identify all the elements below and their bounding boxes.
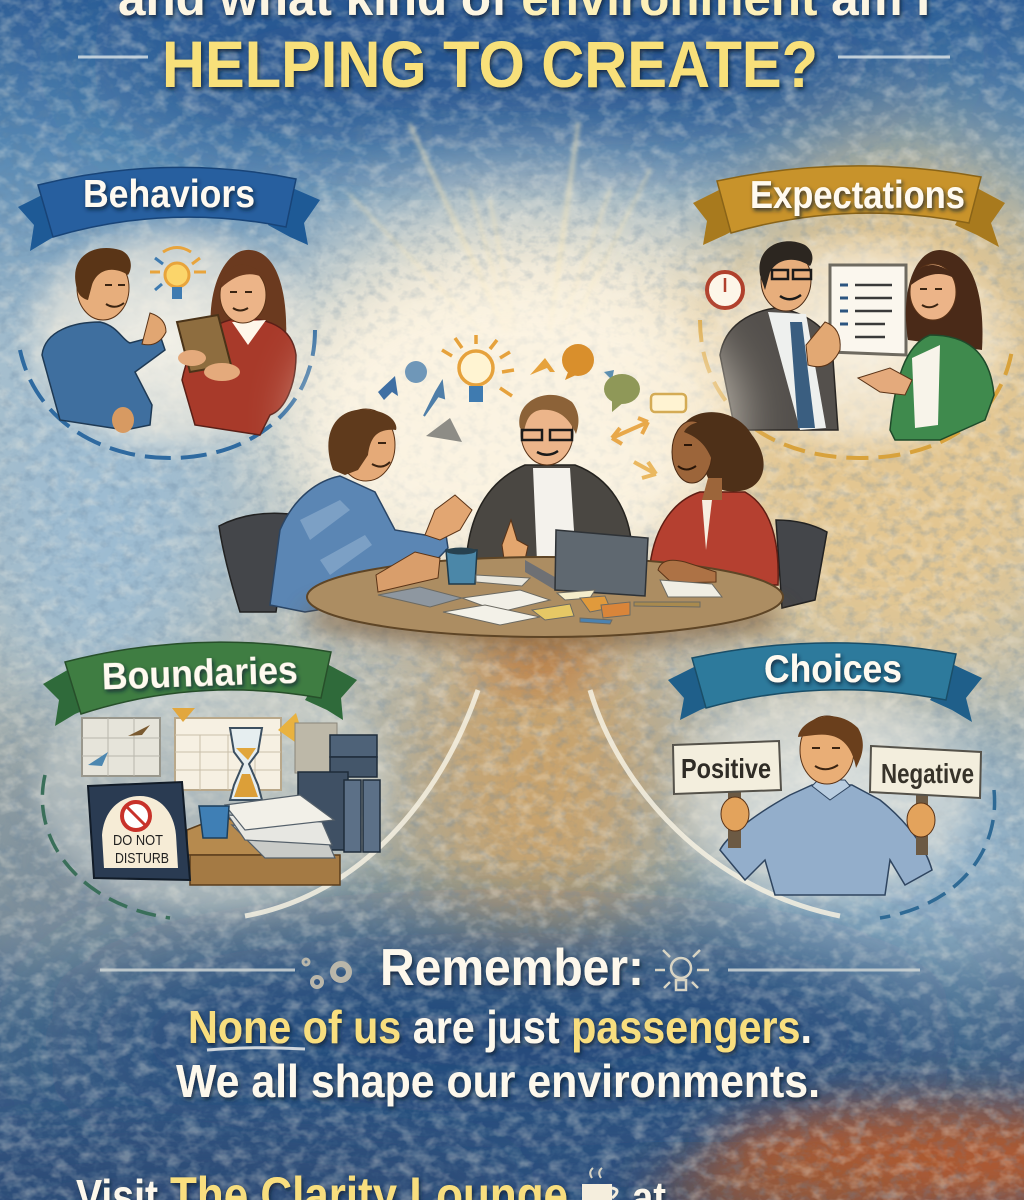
banner label: Choices [764, 648, 902, 691]
round table [307, 557, 783, 637]
ribbon tails [18, 187, 320, 251]
message line two: We all shape our environments. [176, 1055, 820, 1107]
left man in blue shirt [270, 409, 472, 612]
sign: negative: Negative [881, 758, 974, 789]
laptop [525, 530, 648, 596]
woman in green jacket [858, 250, 994, 440]
icon: clock [707, 272, 743, 308]
sign: positive: Positive [681, 753, 771, 784]
man in dark suit [720, 241, 840, 430]
dashed circle [20, 330, 315, 458]
papers and sticky notes [378, 575, 722, 625]
binders [298, 735, 380, 852]
icon: no entry [122, 802, 150, 830]
banner label: Boundaries [101, 650, 298, 698]
panel: behaviors [10, 215, 326, 465]
sweeping arc [590, 690, 840, 916]
vignette [695, 227, 1024, 463]
middle man in gray blazer [467, 395, 632, 566]
idea glow [300, 280, 740, 560]
ribbon tails [693, 187, 1005, 247]
banner: expectations [693, 166, 1005, 247]
table shadow [305, 588, 785, 648]
sign text: DISTURB [115, 850, 169, 867]
woman forearms [658, 560, 716, 583]
man with two signs [720, 716, 935, 895]
radiating light rays [350, 125, 650, 330]
banner label: Expectations [750, 174, 965, 217]
vignette [10, 215, 326, 465]
wall calendar left [82, 718, 160, 776]
sign: positive [673, 741, 781, 794]
icon: lightbulb [150, 248, 206, 299]
panel: choices [590, 673, 997, 918]
icon: coffee cup [582, 1168, 617, 1200]
ribbon body [692, 643, 956, 708]
sign text: DO NOT [113, 832, 163, 849]
icon: small lightbulb [655, 950, 709, 990]
blue mug [199, 806, 229, 838]
title line two: HELPING TO CREATE? [162, 27, 818, 101]
dashed circle [880, 790, 995, 918]
vignette [37, 665, 393, 915]
banner label: Behaviors [83, 173, 255, 216]
underline: none [207, 1048, 305, 1050]
woman in red top [650, 412, 778, 585]
sign: negative [870, 746, 981, 798]
panel: central meeting scene [219, 280, 827, 648]
banner: boundaries [43, 642, 357, 726]
icon: gears [303, 959, 349, 987]
panel: boundaries [37, 665, 478, 918]
desk [187, 815, 340, 885]
left chair [219, 513, 290, 612]
dashed circle [42, 775, 170, 918]
ribbon body [717, 166, 981, 233]
icons: ideas and arrows [378, 335, 686, 478]
blue coffee mug [446, 548, 477, 584]
footer line [76, 1167, 666, 1200]
remember heading: Remember: [380, 939, 644, 997]
stacked papers [225, 795, 335, 858]
star note [278, 713, 308, 742]
message line one: None of us are just passengers. [188, 1001, 812, 1053]
title [118, 0, 930, 101]
ribbon tails [668, 664, 982, 722]
banner: behaviors [18, 167, 320, 251]
ribbon tails [43, 664, 357, 726]
remember side rules [100, 968, 920, 972]
title side rules [78, 56, 950, 58]
gray document [295, 723, 337, 773]
do not disturb sign [88, 782, 190, 880]
man in blue shirt [42, 248, 166, 433]
left man forearm [376, 552, 440, 592]
woman in red with tablet [177, 250, 296, 435]
sweeping arc [245, 690, 478, 916]
banner: choices [668, 643, 982, 722]
sign text [113, 832, 169, 867]
ribbon body [65, 642, 331, 714]
wall calendar right [172, 708, 281, 790]
hourglass [230, 728, 262, 800]
panel: expectations [695, 227, 1024, 463]
ribbon body [38, 167, 296, 237]
checklist board [830, 265, 906, 355]
dashed circle [700, 320, 1012, 458]
right chair [776, 520, 827, 608]
closing message [176, 1001, 820, 1107]
vignette [653, 673, 997, 917]
